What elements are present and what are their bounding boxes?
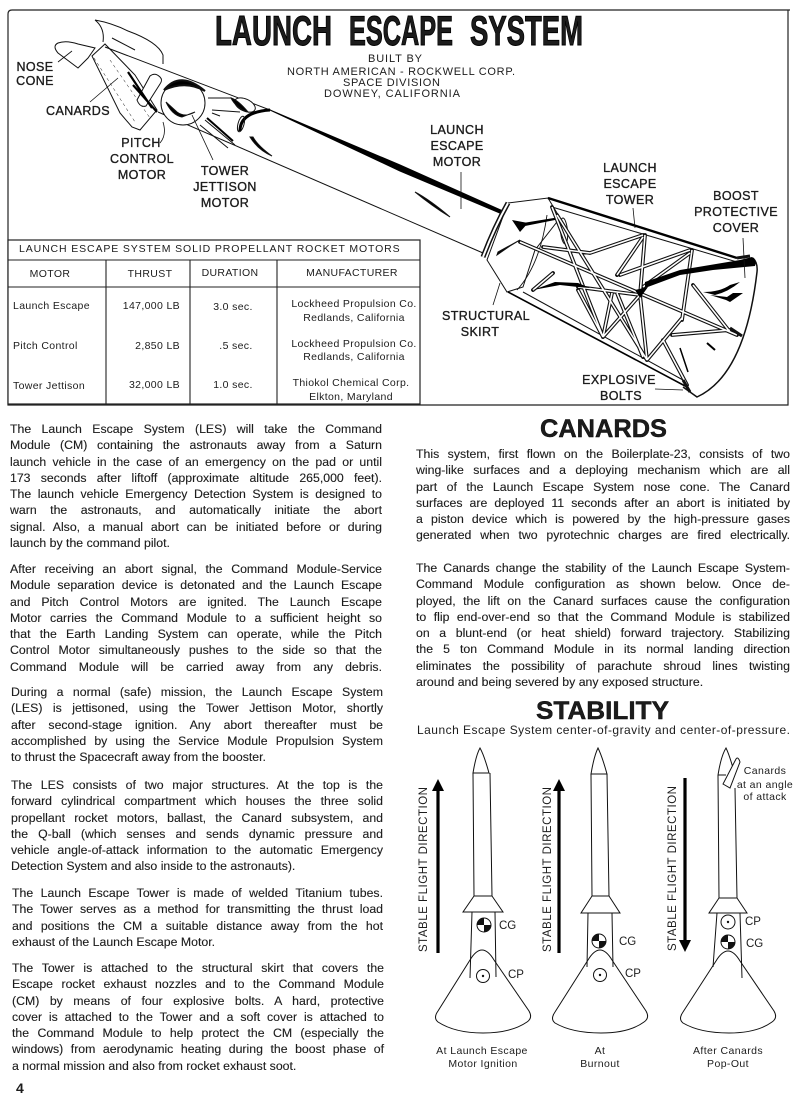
- builder credit: SPACE DIVISION: [343, 77, 440, 89]
- text block: LES overview: launch by the command pilot.: [10, 536, 170, 550]
- callout labels: MOTOR: [433, 155, 481, 169]
- diagram: at burnout: CG: [619, 936, 636, 948]
- text block: canards system: This system, first flown on the Boilerplate-23, consists of two: [416, 447, 790, 461]
- text block: LES structures: forward cylindrical compartment which houses the three solid: [11, 794, 383, 808]
- structural skirt: [487, 198, 560, 292]
- table: solid propellant rocket motors: 1.0 sec.: [213, 379, 253, 391]
- table: solid propellant rocket motors: .5 sec.: [219, 340, 253, 352]
- diagram: at burnout: [542, 748, 648, 1070]
- diagram: at launch escape motor ignition: CG: [499, 920, 516, 932]
- text block: LES overview: [10, 422, 382, 550]
- table: solid propellant rocket motors: Redlands, California: [303, 312, 405, 324]
- text block: canards system: part of the Launch Escape System nose cone. The Canard: [416, 480, 790, 494]
- text block: escape tower: The Launch Escape Tower is made of welded Titanium tubes.: [12, 886, 383, 900]
- title: [215, 7, 583, 54]
- text block: escape tower: and positions the CM a suitable distance away from the hot: [12, 919, 383, 933]
- diagram: at burnout: STABLE FLIGHT DIRECTION: [542, 787, 554, 952]
- heading: canards: CANARDS: [540, 415, 667, 443]
- diagram: after canards pop-out: Canards: [744, 765, 786, 777]
- text block: normal mission: to thrust the Spacecraft away from the booster.: [11, 750, 266, 764]
- text block: LES overview: launch vehicle in the case of an emergency on the pad or until: [10, 455, 382, 469]
- table: solid propellant rocket motors: MOTOR: [30, 268, 70, 280]
- callout labels: CONE: [16, 74, 54, 88]
- table: solid propellant rocket motors: MANUFACTURER: [306, 267, 398, 279]
- table: solid propellant rocket motors: Elkton, Maryland: [309, 391, 393, 403]
- callout labels: PROTECTIVE: [694, 205, 778, 219]
- table: solid propellant rocket motors: [8, 240, 420, 404]
- diagram: at burnout: Burnout: [580, 1058, 620, 1070]
- text block: abort sequence: and Pitch Control Motors are ignited. The Launch Escape: [10, 595, 382, 609]
- text block: abort sequence: Motor carries the Command Module to a sufficient height so: [10, 611, 382, 625]
- text block: LES structures: Detection System and also inside to the astronauts).: [11, 859, 295, 873]
- table: solid propellant rocket motors: 2,850 LB: [135, 340, 180, 352]
- text block: abort sequence: Module separation device is detonated and the Launch Escape: [10, 578, 382, 592]
- callout labels: CONTROL: [110, 152, 174, 166]
- heading: stability: STABILITY: [536, 697, 669, 725]
- table: solid propellant rocket motors: Redlands, California: [303, 351, 405, 363]
- text block: normal mission: after second-stage ignition. Any abort thereafter must be: [11, 718, 383, 732]
- title: SYSTEM: [470, 7, 583, 54]
- callout labels: MOTOR: [118, 168, 166, 182]
- callout labels: JETTISON: [193, 180, 257, 194]
- text block: canards stability: the 5 ton Command Module in its normal landing direction: [416, 642, 790, 656]
- tower jettison motor ball: [161, 81, 205, 125]
- tower struts outline: [520, 207, 737, 385]
- builder credit: DOWNEY, CALIFORNIA: [324, 88, 461, 100]
- text block: canards system: [416, 447, 790, 542]
- text block: canards system: a piston device which is powered by the high-pressure gases: [416, 512, 790, 526]
- diagram: at burnout: At: [595, 1045, 605, 1057]
- text block: LES structures: vehicle angle-of-attack information to the automatic Emergency: [11, 843, 383, 857]
- callout labels: BOOST: [713, 189, 759, 203]
- diagram: after canards pop-out: CP: [745, 916, 761, 928]
- callout labels: LAUNCH: [603, 161, 657, 175]
- diagram: after canards pop-out: at an angle: [737, 779, 793, 791]
- callout labels: NOSE: [16, 60, 54, 74]
- text block: escape tower: The Tower serves as a method for transmitting the thrust load: [12, 902, 383, 916]
- text block: canards stability: eliminates the possibility of parachute shroud lines twisting: [416, 659, 790, 673]
- builder credit: BUILT BY: [368, 53, 423, 65]
- text block: LES overview: signal. Also, a manual abort can be initiated before or during: [10, 520, 382, 534]
- diagram: at launch escape motor ignition: CP: [508, 969, 524, 981]
- diagram: at burnout: CP: [625, 968, 641, 980]
- callout labels: STRUCTURAL: [442, 309, 530, 323]
- table: solid propellant rocket motors: Launch Escape: [13, 300, 90, 312]
- callout labels: COVER: [713, 221, 759, 235]
- stability caption: Launch Escape System center-of-gravity and center-of-pressure.: [417, 723, 790, 737]
- builder credit: [287, 53, 515, 100]
- bottom rail: [508, 292, 687, 387]
- text block: canards stability: The Canards change the stability of the Launch Escape System-: [416, 561, 790, 575]
- text block: canards stability: to flip end-over-end so that the Command Module is stabilized: [416, 610, 790, 624]
- canards: [95, 20, 163, 64]
- nose cone: [55, 42, 95, 68]
- text block: tower attachment: (CM) by means of four explosive bolts. A hard, protective: [12, 994, 384, 1008]
- text block: canards system: generated when two pyrotechnic charges are fired electrically.: [416, 528, 790, 542]
- callout labels: PITCH: [121, 136, 161, 150]
- table: solid propellant rocket motors: Tower Jettison: [13, 380, 85, 392]
- text block: abort sequence: Command Module will be carried away from any debris.: [10, 660, 382, 674]
- diagram: after canards pop-out: After Canards: [693, 1045, 763, 1057]
- cover: [683, 258, 757, 397]
- text block: canards stability: on a blunt-end (or heat shield) forward trajectory. Stabilizing: [416, 626, 790, 640]
- callout labels: ESCAPE: [603, 177, 657, 191]
- top rail: [548, 198, 737, 258]
- text block: tower attachment: Escape rocket exhaust nozzles and to the Command Module: [12, 977, 384, 991]
- diagram: after canards pop-out: Pop-Out: [707, 1058, 749, 1070]
- text block: abort sequence: After receiving an abort signal, the Command Module-Service: [10, 562, 382, 576]
- diagram: after canards pop-out: [667, 748, 793, 1070]
- table: solid propellant rocket motors: Thiokol Chemical Corp.: [293, 377, 409, 389]
- text block: tower attachment: windows) from aerodynamic heating during the boost phase of: [12, 1042, 384, 1056]
- text block: tower attachment: [12, 961, 384, 1073]
- diagram: at launch escape motor ignition: [418, 748, 531, 1070]
- text block: LES overview: The launch vehicle Emergency Detection System is designed to: [10, 487, 382, 501]
- pitch control motor: [137, 74, 162, 106]
- casing lines: [105, 47, 270, 110]
- builder credit: NORTH AMERICAN - ROCKWELL CORP.: [287, 66, 515, 78]
- text block: LES overview: Module (CM) containing the astronauts away from a Saturn: [10, 438, 382, 452]
- text block: escape tower: [12, 886, 383, 949]
- text block: LES overview: The Launch Escape System (LES) will take the Command: [10, 422, 382, 436]
- callout labels: EXPLOSIVE: [582, 373, 656, 387]
- table: solid propellant rocket motors: DURATION: [202, 267, 258, 279]
- text block: abort sequence: Control Motor simultaneously pushes to the side so that the: [10, 643, 382, 657]
- text block: LES overview: warn the astronauts, and automatically initiate the abort: [10, 503, 382, 517]
- text block: tower attachment: the Command Module to help protect the CM (especially the: [12, 1026, 384, 1040]
- text block: canards stability: Command Module configuration as shown below. Once de-: [416, 577, 790, 591]
- callout leaders: [58, 51, 745, 390]
- title: ESCAPE: [349, 7, 453, 54]
- text block: normal mission: (LES) is jettisoned, using the Tower Jettison Motor, shortly: [11, 701, 383, 715]
- text block: canards system: wing-like surfaces and a deploying mechanism which are all: [416, 463, 790, 477]
- table: solid propellant rocket motors: 147,000 LB: [123, 300, 180, 312]
- cutaway: forward compartment and motor: [55, 20, 503, 253]
- top panel frame: [8, 10, 790, 405]
- text block: LES structures: [11, 778, 383, 873]
- text block: canards stability: ployed, the lift on the Canard surfaces cause the configuration: [416, 594, 790, 608]
- table: solid propellant rocket motors: THRUST: [128, 268, 173, 280]
- heavy shadow band: [645, 257, 756, 288]
- table: solid propellant rocket motors: 32,000 LB: [129, 379, 180, 391]
- tower struts core: [520, 207, 737, 385]
- table: solid propellant rocket motors: Lockheed Propulsion Co.: [291, 338, 417, 350]
- text block: tower attachment: a normal mission and also from rocket exhaust soot.: [12, 1059, 296, 1073]
- diagram: at launch escape motor ignition: STABLE FLIGHT DIRECTION: [418, 787, 430, 952]
- text block: canards system: surfaces are deployed 11 seconds after an abort is initiated by: [416, 496, 790, 510]
- text block: canards stability: [416, 561, 790, 689]
- callout labels: ESCAPE: [430, 139, 484, 153]
- diagram: at launch escape motor ignition: At Launch Escape: [436, 1045, 528, 1057]
- text block: normal mission: [11, 685, 383, 764]
- table: solid propellant rocket motors: Pitch Control: [13, 340, 78, 352]
- escape motor: [240, 110, 270, 131]
- text block: abort sequence: that the Earth Landing System can operate, while the Pitch: [10, 627, 382, 641]
- text block: normal mission: During a normal (safe) mission, the Launch Escape System: [11, 685, 383, 699]
- callout labels: SKIRT: [461, 325, 499, 339]
- text block: tower attachment: The Tower is attached to the structural skirt that covers the: [12, 961, 384, 975]
- text block: canards stability: around and being severed by any exposed structure.: [416, 675, 703, 689]
- text block: normal mission: accomplished by using the Service Module Propulsion System: [11, 734, 383, 748]
- cutaway: structural skirt and tower: [483, 198, 757, 397]
- text block: tower attachment: cover is attached to the Tower and a soft cover is attached to: [12, 1010, 384, 1024]
- diagram: after canards pop-out: STABLE FLIGHT DIRECTION: [667, 786, 679, 951]
- callout labels: MOTOR: [201, 196, 249, 210]
- text block: LES structures: The LES consists of two major structures. At the top is the: [11, 778, 383, 792]
- text block: abort sequence: [10, 562, 382, 674]
- callout labels: TOWER: [201, 164, 249, 178]
- callout labels: CANARDS: [46, 104, 110, 118]
- callout labels: [16, 60, 778, 403]
- text block: LES structures: the Q-ball (which senses and sends dynamic pressure and: [11, 827, 383, 841]
- text block: escape tower: exhaust of the Launch Escape Motor.: [12, 935, 215, 949]
- table: solid propellant rocket motors: 3.0 sec.: [213, 301, 253, 313]
- text block: LES overview: 173 seconds after liftoff (approximate altitude 265,000 feet).: [10, 471, 382, 485]
- diagram: at launch escape motor ignition: Motor Ignition: [448, 1058, 518, 1070]
- table: solid propellant rocket motors: LAUNCH ESCAPE SYSTEM SOLID PROPELLANT ROCKET MOTORS: [19, 243, 400, 255]
- page number: 4: [16, 1080, 24, 1096]
- table: solid propellant rocket motors: Lockheed Propulsion Co.: [291, 298, 417, 310]
- callout labels: LAUNCH: [430, 123, 484, 137]
- callout labels: BOLTS: [600, 389, 642, 403]
- callout labels: TOWER: [606, 193, 654, 207]
- diagram: after canards pop-out: CG: [746, 938, 763, 950]
- diagram: after canards pop-out: of attack: [743, 791, 787, 803]
- text block: LES structures: propellant rocket motors, ballast, the Canard subsystem, and: [11, 811, 383, 825]
- title: LAUNCH: [215, 7, 332, 54]
